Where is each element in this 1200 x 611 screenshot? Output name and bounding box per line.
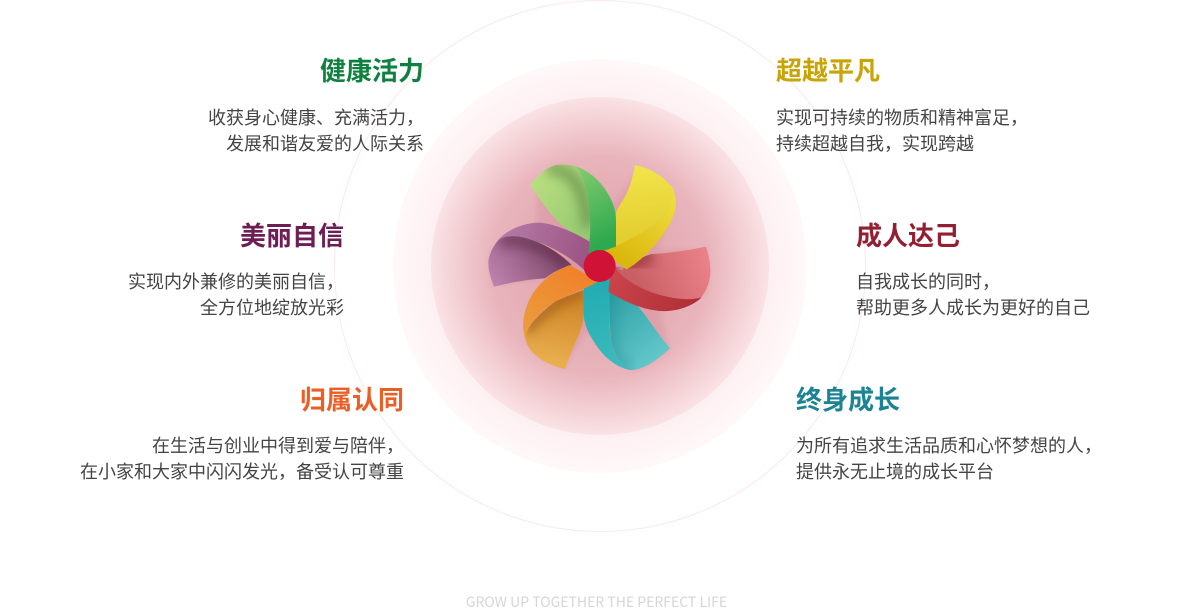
petal: yellow [602,165,676,269]
text: 归属认同 description: 在生活与创业中得到爱与陪伴， [152,432,404,458]
heading: 美丽自信: 美丽自信 [240,216,344,253]
text: 成人达己 description [856,268,1090,320]
heading: 超越平凡: 超越平凡 [776,51,880,88]
heading: 归属认同: 归属认同 [300,380,404,417]
petal: red [608,247,710,311]
text: 美丽自信 description: 实现内外兼修的美丽自信， [128,268,344,294]
outer ring [334,0,866,532]
middle circle [393,59,807,473]
heading: 健康活力: 健康活力 [320,51,424,88]
text: 成人达己 description: 帮助更多人成长为更好的自己 [856,294,1090,320]
petal: teal [583,278,670,370]
text: 健康活力 description [208,104,424,156]
heading: 终身成长: 终身成长 [796,380,900,417]
text: 终身成长 description: 为所有追求生活品质和心怀梦想的人， [796,432,1102,458]
text: 归属认同 description [80,432,404,484]
text: 超越平凡 description: 持续超越自我，实现跨越 [776,130,974,156]
text: 健康活力 description: 发展和谐友爱的人际关系 [226,130,424,156]
heading: 成人达己: 成人达己 [856,216,960,253]
text: 归属认同 description: 在小家和大家中闪闪发光，备受认可尊重 [80,458,404,484]
text: 终身成长 description: 提供永无止境的成长平台 [796,458,994,484]
text: 美丽自信 description [128,268,344,320]
hub [584,250,616,282]
text: 成人达己 description: 自我成长的同时， [856,268,1000,294]
pinwheel [488,165,710,372]
central circles and pinwheel [334,0,866,532]
text: 健康活力 description: 收获身心健康、充满活力， [208,104,424,130]
text: 超越平凡 description: 实现可持续的物质和精神富足， [776,104,1028,130]
petal: orange [523,265,598,369]
petal: purple [488,223,589,287]
text: 终身成长 description [796,432,1102,484]
pinwheel soft shadow [490,170,707,372]
text: 超越平凡 description [776,104,1028,156]
petal: green [530,165,616,257]
inner glow circle [431,97,769,435]
text: 美丽自信 description: 全方位地绽放光彩 [200,294,344,320]
